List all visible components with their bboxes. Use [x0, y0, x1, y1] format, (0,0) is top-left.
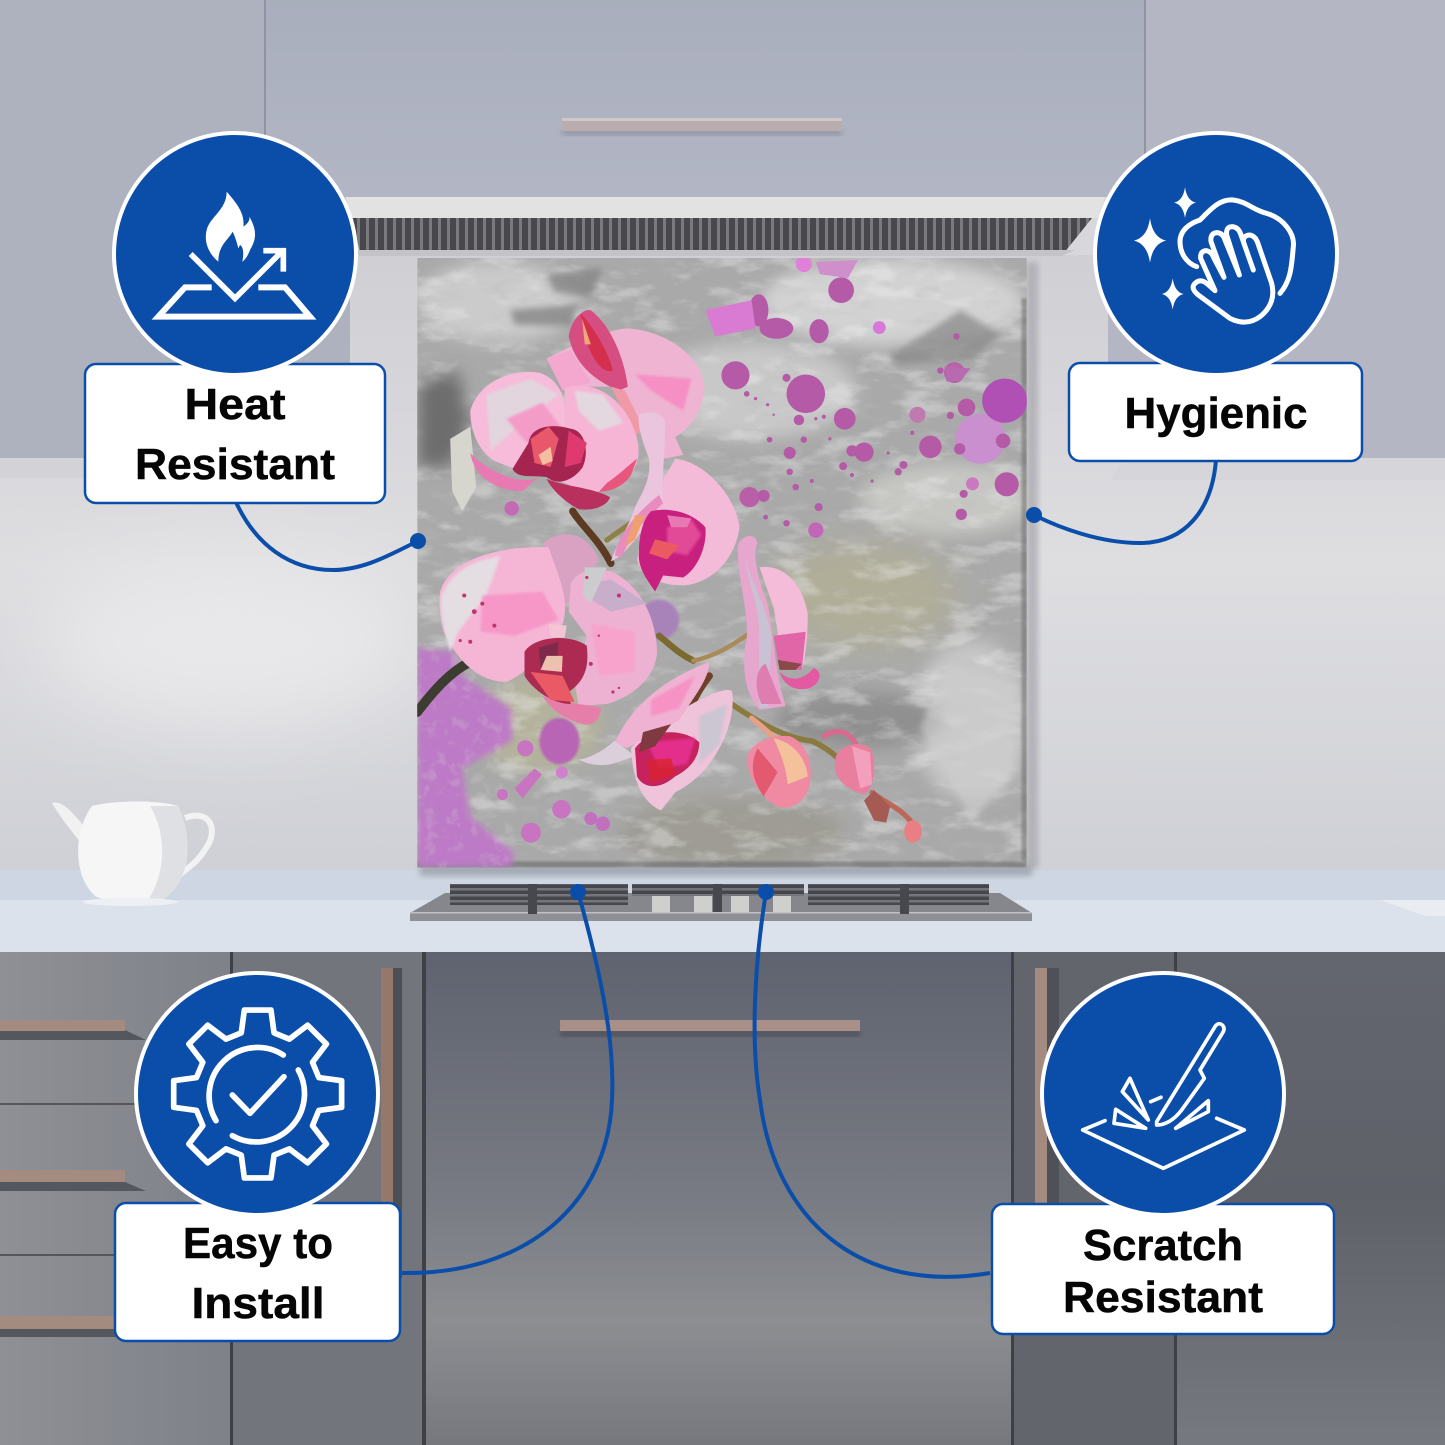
paint splatter	[497, 256, 1027, 843]
purple wash bottom left	[417, 600, 679, 868]
label box	[992, 1204, 1334, 1334]
orchid stems	[417, 511, 910, 821]
bottom orchid bloom	[579, 662, 733, 811]
lower cabinets	[0, 952, 1445, 1445]
label box	[1069, 363, 1362, 461]
label box	[115, 1203, 400, 1341]
gas hob	[410, 884, 1032, 921]
middle orchid bloom	[611, 412, 739, 592]
icon: gear with check mark	[174, 1010, 342, 1178]
label text	[135, 380, 335, 489]
label text: Hygienic	[1124, 389, 1308, 438]
label text: Easy to	[183, 1219, 333, 1268]
teapot	[52, 802, 212, 906]
connector: scratch resistant	[755, 884, 990, 1277]
label text: Resistant	[1063, 1273, 1263, 1322]
icon circle	[1042, 973, 1284, 1215]
connector: hygienic	[1026, 460, 1216, 543]
feature: easy to install	[115, 973, 400, 1341]
label text: Heat	[184, 380, 286, 429]
upper cabinets	[0, 0, 1445, 480]
icon: knife on scratch-proof surface	[1083, 1024, 1244, 1168]
connector: easy to install	[402, 884, 612, 1273]
label text: Scratch	[1083, 1221, 1243, 1270]
large lower orchid bloom	[440, 534, 657, 724]
feature: scratch resistant	[992, 973, 1334, 1334]
feature: hygienic	[1069, 133, 1362, 461]
countertop	[0, 870, 1445, 953]
label text	[1063, 1221, 1263, 1322]
icon: hand wiping with sparkles	[1134, 187, 1293, 322]
upper cabinet handle	[562, 118, 842, 135]
upper orchid bloom	[470, 310, 705, 510]
extractor hood	[345, 197, 1105, 256]
icon: flame over surface with deflecting arrow	[158, 192, 310, 317]
label text: Resistant	[135, 440, 335, 489]
orchid buds	[747, 736, 922, 843]
painted grey background	[417, 258, 1037, 869]
icon circle	[136, 973, 378, 1215]
orchid painting	[417, 256, 1037, 869]
label text	[183, 1219, 333, 1328]
label text: Install	[192, 1279, 324, 1328]
icon circle	[1095, 133, 1337, 375]
icon circle	[114, 133, 356, 375]
label box	[85, 364, 385, 503]
connector: heat resistant	[235, 500, 426, 570]
feature: heat resistant	[85, 133, 385, 503]
painting shadow	[420, 262, 1038, 876]
side orchid bloom	[737, 536, 820, 710]
